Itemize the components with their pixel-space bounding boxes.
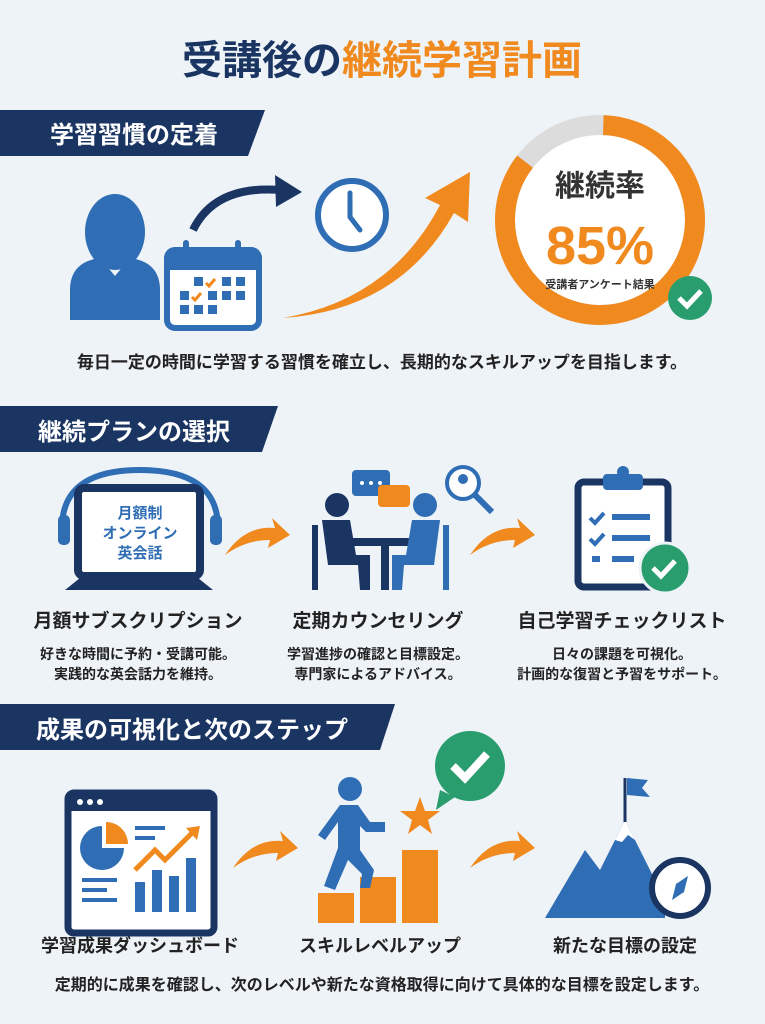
label: 学習成果ダッシュボード: 学習成果ダッシュボード — [41, 935, 239, 956]
caption 3: 定期的に成果を確認し、次のレベルや新たな資格取得に向けて具体的な目標を設定します。 — [55, 975, 709, 994]
label: 月額サブスクリプション: 月額サブスクリプション — [33, 609, 243, 632]
icon: dashboard — [68, 793, 214, 933]
ring chart: 85%: 85% — [546, 216, 654, 276]
arrow 3a — [233, 831, 298, 868]
caption 1: 毎日一定の時間に学習する習慣を確立し、長期的なスキルアップを目指します。 — [77, 352, 687, 372]
icon: laptop with headset: オンライン — [102, 525, 178, 542]
label: 新たな目標の設定: 新たな目標の設定 — [553, 936, 697, 956]
banner: section 2 heading — [0, 406, 278, 452]
label: 自己学習チェックリスト: 日々の課題を可視化。 — [552, 646, 692, 662]
ring chart: 85%: 継続率 — [555, 170, 645, 203]
banner: section 2 heading: 継続プランの選択 — [38, 419, 230, 446]
banner: section 1 heading — [0, 110, 265, 156]
arrow 3b — [470, 831, 535, 868]
label: 定期カウンセリング: 定期カウンセリング — [292, 609, 464, 632]
label: 定期カウンセリング — [287, 609, 469, 682]
label: 定期カウンセリング: 学習進捗の確認と目標設定。 — [287, 646, 469, 662]
arrow 2b — [470, 518, 535, 555]
icon: skill level up — [318, 731, 505, 923]
icon: laptop with headset — [58, 470, 222, 590]
banner: section 3 heading — [0, 704, 395, 750]
icon: clock — [318, 181, 386, 249]
ring chart: 85%: 受講者アンケート結果 — [545, 277, 655, 291]
icon: laptop with headset: 月額制 — [117, 504, 163, 522]
label: 自己学習チェックリスト — [517, 609, 727, 682]
label: 自己学習チェックリスト: 自己学習チェックリスト — [517, 609, 727, 632]
arrow: dark curve — [193, 175, 302, 230]
label: 月額サブスクリプション: 実践的な英会話力を維持。 — [54, 666, 222, 682]
arrow: orange growth — [283, 172, 470, 318]
icon: counseling meeting — [312, 467, 492, 590]
label: 月額サブスクリプション: 好きな時間に予約・受講可能。 — [40, 646, 236, 662]
ring chart: 85% — [502, 122, 698, 318]
title: 受講後の継続学習計画 — [182, 39, 582, 83]
banner: section 3 heading: 成果の可視化と次のステップ — [36, 717, 348, 744]
banner: section 1 heading: 学習習慣の定着 — [50, 122, 218, 149]
icon: person — [70, 194, 160, 320]
label: 月額サブスクリプション — [33, 609, 243, 682]
label: スキルレベルアップ: スキルレベルアップ — [299, 936, 461, 956]
arrow 2a — [225, 518, 290, 555]
icon: checklist clipboard — [578, 466, 690, 593]
label: 自己学習チェックリスト: 計画的な復習と予習をサポート。 — [517, 666, 727, 682]
label: 定期カウンセリング: 専門家によるアドバイス。 — [294, 666, 462, 682]
icon: laptop with headset: 英会話 — [117, 545, 163, 562]
icon: calendar — [167, 240, 259, 328]
icon: green check — [668, 276, 712, 320]
icon: mountain with flag and compass — [545, 778, 708, 918]
